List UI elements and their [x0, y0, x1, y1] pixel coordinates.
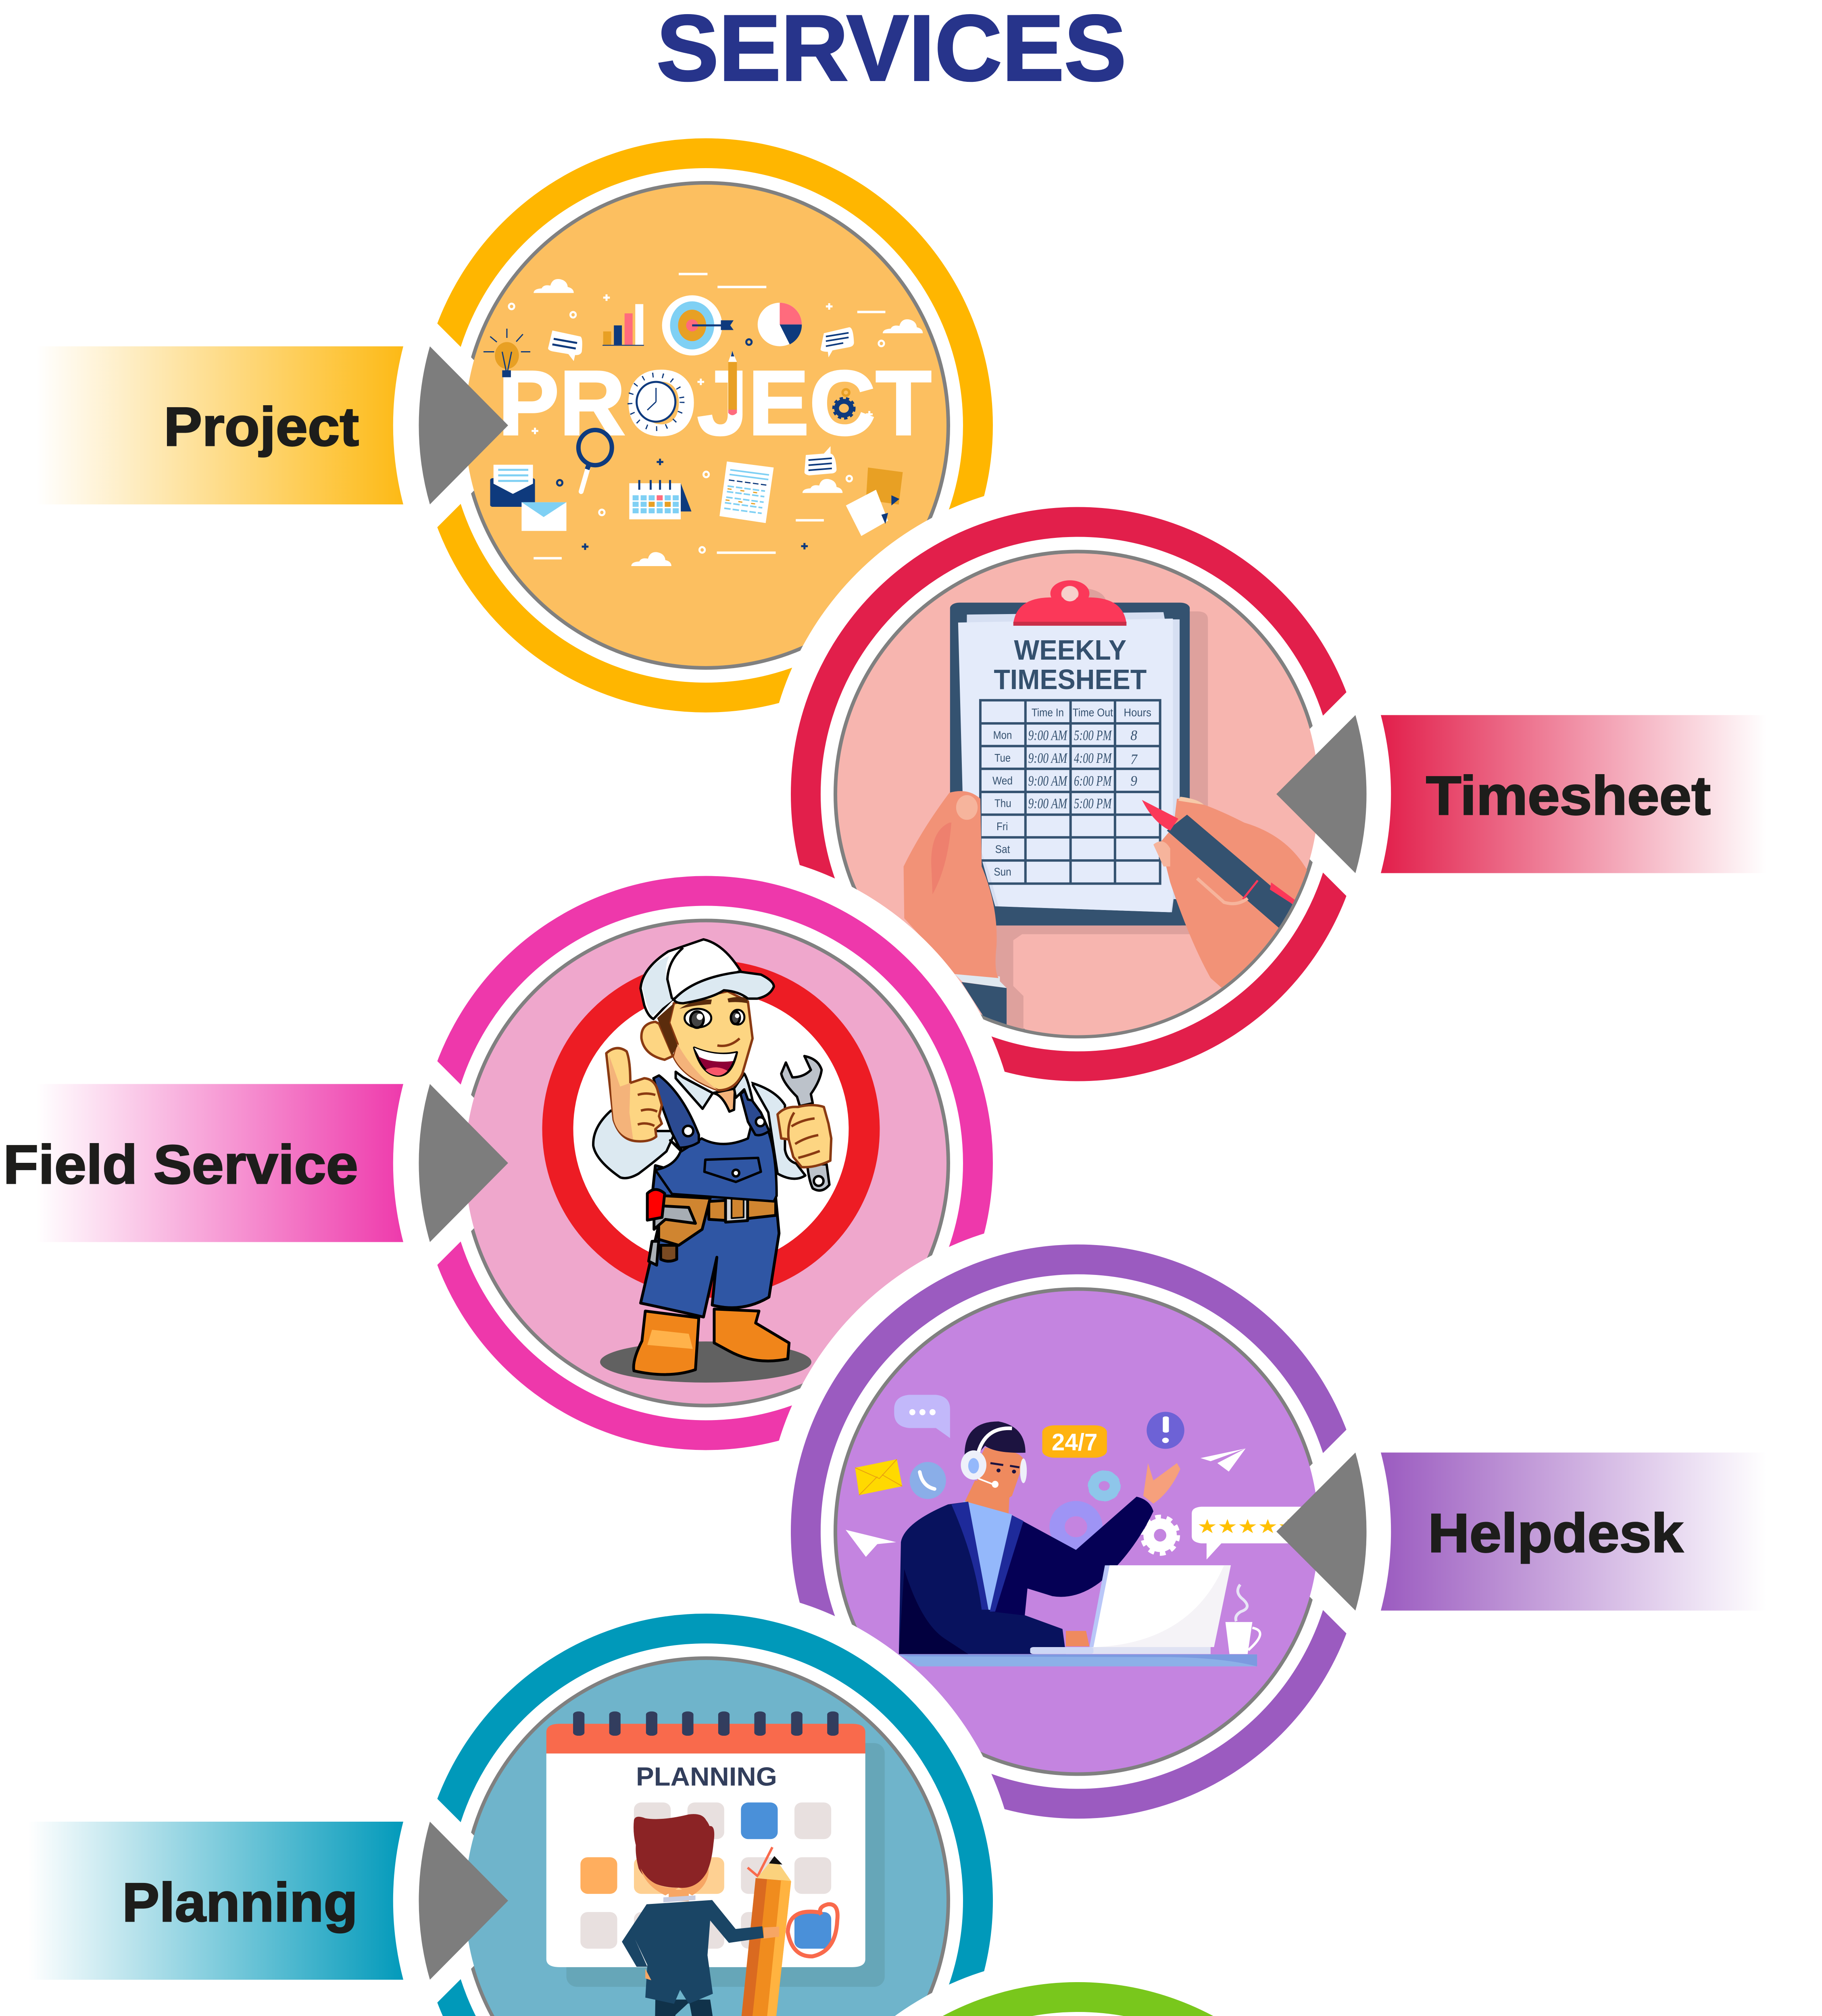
coffee cup	[1226, 1585, 1260, 1654]
label: Helpdesk: Helpdesk	[1428, 1502, 1683, 1564]
icon: envelope	[855, 1459, 902, 1495]
icon: chat bubble 3	[805, 446, 836, 475]
timesheet table: Mon	[993, 729, 1012, 741]
timesheet table: Sat	[995, 843, 1010, 856]
icon: review bubble: ★	[1217, 1515, 1238, 1538]
agent figure	[899, 1421, 1180, 1654]
desk	[899, 1654, 1257, 1666]
illustration: helpdesk agent	[846, 1395, 1305, 1666]
icon: paper planes	[846, 1448, 1246, 1557]
timesheet table: Thu	[994, 797, 1011, 810]
timesheet table: Hours	[1124, 706, 1151, 719]
laptop	[1030, 1565, 1231, 1654]
illustration: field service worker	[558, 939, 864, 1383]
timesheet table: 9:00 AM	[1028, 727, 1068, 744]
pencil	[731, 1847, 791, 2016]
clipboard clip	[1013, 580, 1126, 626]
icon: sticky notes	[846, 467, 903, 536]
wrench	[781, 1056, 830, 1191]
icon: review bubble: ★	[1278, 1515, 1298, 1538]
icon: calendar	[629, 480, 692, 519]
panel: Helpdesk	[765, 1219, 1774, 1844]
arrow: Field Service	[419, 1084, 508, 1242]
panel: Timesheet	[765, 481, 1774, 1106]
timesheet table: Sun	[994, 866, 1011, 878]
panel: Planning	[20, 1588, 1018, 2016]
worker upper body	[593, 939, 831, 1202]
timesheet table: 5:00 PM	[1074, 727, 1112, 744]
icon: chat bubble 2	[821, 327, 854, 357]
label: Planning: Planning	[122, 1872, 358, 1933]
heading on sheet: WEEKLY	[1014, 635, 1126, 666]
panel: Field Service	[3, 851, 1018, 1476]
icon: document	[719, 462, 774, 523]
arrow: Planning	[419, 1822, 508, 1980]
timesheet table: 7	[1130, 751, 1138, 767]
icon: 24/7 badge: 24/7	[1052, 1429, 1097, 1456]
icon: clock	[630, 375, 682, 429]
icon: gears	[834, 389, 854, 418]
arrow: Helpdesk	[1276, 1452, 1367, 1610]
icon: phone	[910, 1462, 946, 1499]
panel: Project	[24, 113, 1018, 738]
icon: alert	[1147, 1412, 1184, 1449]
arrow: Timesheet	[1276, 715, 1367, 873]
timesheet table: Fri	[996, 821, 1008, 833]
illustration: timesheet clipboard and hands	[904, 580, 1315, 1042]
timesheet table: 4:00 PM	[1074, 750, 1112, 766]
icon: review bubble: ★	[1197, 1515, 1217, 1538]
illustration: project word cloud: PROJECT	[498, 352, 932, 454]
label: Timesheet: Timesheet	[1426, 765, 1711, 826]
icon: pencil	[728, 351, 737, 415]
right hand and pen	[1142, 797, 1315, 990]
icon: 24/7 badge	[1042, 1425, 1107, 1458]
illustration: timesheet clipboard and hands: TIMESHEET	[994, 664, 1147, 695]
arrow: Project	[419, 346, 508, 504]
timesheet table: 5:00 PM	[1074, 796, 1112, 812]
left hand	[904, 791, 1007, 1026]
timesheet table: Time Out	[1073, 706, 1113, 719]
band: Project	[24, 346, 403, 504]
timesheet table: 6:00 PM	[1074, 773, 1112, 789]
panel: Appointments	[765, 1957, 1818, 2016]
band: Timesheet	[1381, 715, 1774, 873]
icon: chat bubble	[548, 331, 582, 361]
icon: target	[662, 295, 734, 356]
timesheet table: Time In	[1032, 706, 1064, 719]
timesheet table: Tue	[994, 752, 1011, 764]
icon: magnifier	[578, 430, 612, 492]
calendar sheet	[546, 1712, 865, 1967]
man	[622, 1814, 779, 2016]
icon: review bubble	[1192, 1507, 1305, 1560]
timesheet table: 9:00 AM	[1028, 796, 1068, 812]
icon: light bulb	[484, 329, 530, 377]
icon: gears	[1057, 1472, 1178, 1554]
icon: chat bubble	[894, 1395, 950, 1438]
band: Planning	[20, 1822, 403, 1980]
label: Project: Project	[164, 396, 359, 457]
calendar sheet: PLANNING	[636, 1762, 777, 1791]
band: Field Service	[24, 1084, 403, 1242]
icon: envelopes	[490, 465, 566, 531]
illustration: planning calendar	[546, 1712, 885, 2016]
worker legs and boots	[634, 1166, 789, 1375]
band: Helpdesk	[1381, 1452, 1774, 1610]
timesheet table: 9:00 AM	[1028, 750, 1068, 766]
timesheet table: 9	[1130, 773, 1137, 789]
timesheet table: 8	[1130, 727, 1137, 744]
timesheet table: 9:00 AM	[1028, 773, 1068, 789]
timesheet table	[980, 700, 1160, 883]
illustration: project word cloud	[484, 274, 932, 566]
icon: pie chart	[758, 303, 802, 346]
label: Field Service: Field Service	[3, 1134, 358, 1195]
timesheet table: Wed	[992, 775, 1013, 787]
icon: bar chart	[602, 304, 644, 346]
icon: review bubble: ★	[1238, 1515, 1258, 1538]
icon: review bubble: ★	[1258, 1515, 1278, 1538]
